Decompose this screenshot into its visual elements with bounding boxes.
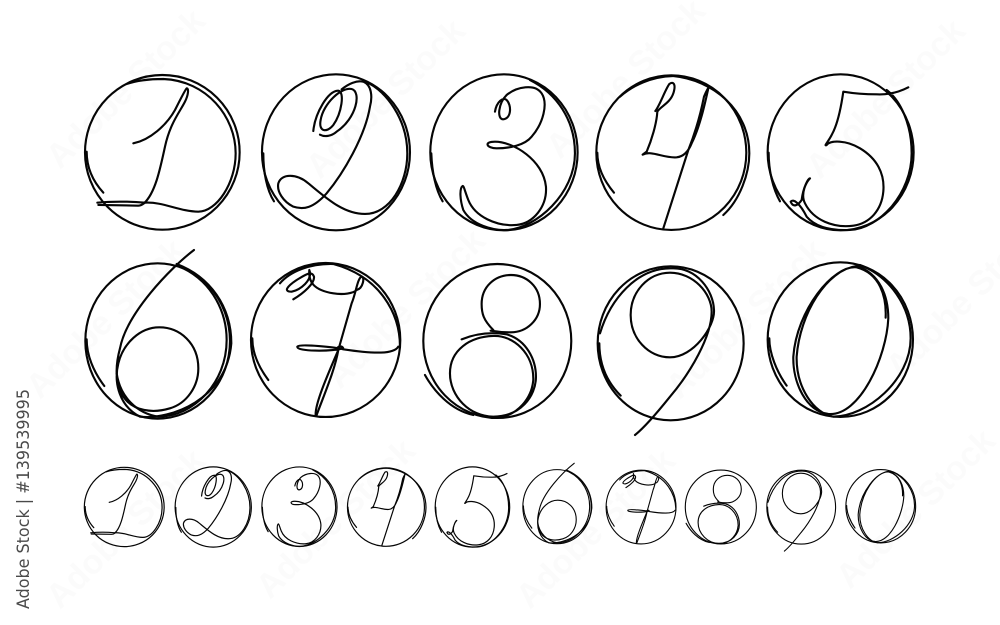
large numeral 7 in circle bbox=[251, 263, 400, 417]
large numeral 0 in circle bbox=[768, 262, 913, 417]
text: Adobe Stock bbox=[829, 422, 1000, 596]
large numeral 2 in circle bbox=[262, 74, 410, 230]
text: Adobe Stock bbox=[799, 12, 973, 186]
large numeral 6 in circle bbox=[85, 250, 231, 419]
small numeral 3 in circle bbox=[262, 467, 337, 546]
small numeral 5 in circle bbox=[435, 467, 510, 547]
text: Adobe Stock bbox=[299, 12, 473, 186]
large numeral 8 in circle bbox=[423, 264, 571, 418]
small numeral 6 in circle bbox=[523, 463, 592, 544]
large numeral 4 in circle bbox=[596, 75, 749, 230]
text: Adobe Stock bbox=[19, 232, 193, 406]
small numeral 7 in circle bbox=[606, 470, 676, 544]
small numeral 9 in circle bbox=[767, 470, 836, 551]
side credit text: Adobe Stock | #139539995 bbox=[14, 389, 34, 609]
text: Adobe Stock bbox=[39, 442, 213, 616]
small numeral 4 in circle bbox=[347, 468, 426, 546]
text: Adobe Stock bbox=[319, 222, 493, 396]
large numeral 5 in circle bbox=[768, 74, 914, 230]
text: Adobe Stock bbox=[249, 432, 423, 606]
large numeral 3 in circle bbox=[430, 74, 578, 230]
large numeral 9 in circle bbox=[598, 266, 744, 435]
text: Adobe Stock bbox=[39, 2, 213, 176]
small numeral 1 in circle bbox=[84, 467, 164, 547]
text: Adobe Stock bbox=[509, 442, 683, 616]
small numeral 0 in circle bbox=[846, 470, 916, 543]
large numeral 1 in circle bbox=[85, 75, 240, 230]
small numeral 8 in circle bbox=[685, 470, 756, 544]
text: Adobe Stock bbox=[659, 232, 833, 406]
small numeral 2 in circle bbox=[175, 467, 251, 547]
